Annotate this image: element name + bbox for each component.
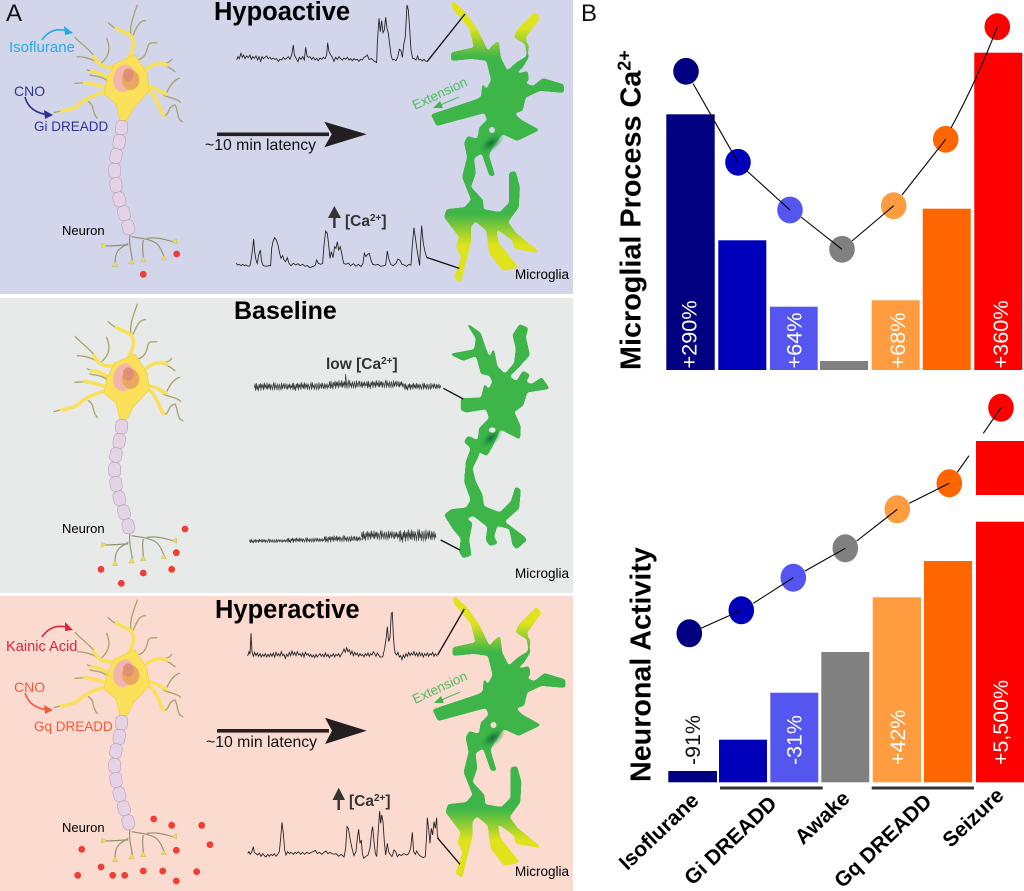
calcium trace: hyperactive lower [248, 811, 460, 864]
red dots: hyperactive [74, 816, 213, 884]
neuron: hyperactive [54, 600, 183, 862]
bar chart: neuronal activity [668, 441, 1024, 782]
calcium label: hyperactive: ] [385, 793, 391, 810]
label: CNO hypoactive: CNO [14, 83, 45, 99]
calcium arrow: hypoactive [328, 206, 341, 228]
bar chart: microglial process calcium: +64% [782, 312, 807, 368]
arrow: kainic acid [42, 622, 73, 637]
microglia: hypoactive [432, 2, 563, 282]
label: Kainic Acid: Kainic Acid [6, 639, 77, 655]
bar chart: microglial process calcium: +290% [677, 300, 702, 368]
label: Neuron hyperactive: Neuron [62, 820, 105, 835]
neuron: baseline [54, 304, 183, 566]
arrow: CNO to Gi DREADD [25, 97, 53, 119]
label: Isoflurane: Isoflurane [9, 39, 75, 56]
calcium label: hypoactive: ] [381, 213, 387, 230]
label: latency hyperactive: ~10 min latency [206, 734, 317, 751]
calcium trace: baseline upper [254, 374, 463, 399]
calcium trace: baseline lower [249, 530, 460, 550]
calcium label: hyperactive: 2+ [374, 793, 386, 804]
bar chart: microglial process calcium [666, 53, 1022, 370]
calcium label: hypoactive: 2+ [370, 213, 382, 224]
bar chart: neuronal activity: -31% [783, 715, 807, 765]
calcium label: baseline: 2+ [381, 356, 393, 367]
label: Microglia hypoactive: Microglia [515, 267, 570, 282]
bar chart: microglial process calcium: +68% [885, 312, 910, 368]
x label: Gq DREADD: Gq DREADD [830, 790, 936, 891]
red dots: hypoactive [140, 251, 180, 278]
panel label A: A [6, 0, 22, 27]
arrow: isoflurane [42, 26, 73, 40]
arrow: CNO to Gq DREADD [25, 693, 53, 714]
calcium label: hyperactive: [Ca [349, 793, 374, 810]
group bracket: Gi DREADD [720, 786, 823, 790]
calcium arrow: hyperactive [332, 788, 345, 810]
red dots: baseline [98, 526, 188, 587]
label: Microglia hyperactive: Microglia [515, 864, 570, 879]
neuron: hypoactive [54, 5, 183, 267]
extension arrow: hyperactive [434, 692, 460, 703]
panel label B: B [581, 0, 597, 27]
title: Hyperactive: Hyperactive [215, 596, 360, 624]
x label: Gi DREADD: Gi DREADD [680, 792, 781, 890]
calcium trace: hypoactive upper [237, 5, 465, 63]
calcium label: baseline: ] [393, 356, 398, 373]
calcium label: baseline: low [Ca [326, 356, 381, 373]
arrow: hyperactive latency [217, 718, 367, 744]
label: Gq DREADD: Gq DREADD [34, 719, 113, 734]
axis title: Microglial Process Ca2+: 2+ [615, 50, 635, 71]
bar chart: neuronal activity: +5,500% [989, 680, 1013, 765]
label: latency hypoactive: ~10 min latency [205, 137, 316, 154]
bar chart: neuronal activity: -91% [681, 715, 705, 765]
label: Gi DREADD: Gi DREADD [34, 119, 109, 134]
arrow: hypoactive latency [217, 122, 367, 147]
extension label: hyperactive: Extension [410, 668, 470, 707]
panel: hyperactive [0, 596, 573, 891]
label: CNO hyperactive: CNO [14, 679, 45, 695]
bar chart: microglial process calcium: +360% [988, 300, 1013, 368]
calcium label: hypoactive: [Ca [345, 213, 370, 230]
calcium trace: hypoactive lower [236, 226, 459, 268]
label: Neuron baseline: Neuron [62, 521, 105, 536]
panel: baseline [0, 298, 573, 593]
bar chart: neuronal activity: +42% [886, 710, 910, 765]
axis title: Microglial Process Ca2+: Microglial Process Ca [616, 71, 648, 370]
x label: Awake: Awake [791, 787, 854, 849]
group bracket: Gq DREADD [872, 786, 974, 790]
axis title: Neuronal Activity: Neuronal Activity [626, 547, 658, 782]
microglia: hyperactive [434, 597, 564, 877]
x label: Isoflurane: Isoflurane [615, 789, 703, 875]
panel: hypoactive [0, 0, 573, 294]
x label: Seizure: Seizure [938, 784, 1008, 852]
label: Microglia baseline: Microglia [515, 566, 570, 581]
line plot: microglial process calcium [673, 13, 1010, 263]
title: Baseline: Baseline [234, 297, 337, 325]
calcium trace: hyperactive upper [248, 609, 464, 660]
extension label: hypoactive: Extension [410, 74, 470, 113]
microglia: baseline [445, 325, 548, 557]
label: Neuron hypoactive: Neuron [62, 223, 105, 238]
line plot: neuronal activity [676, 394, 1014, 647]
extension arrow: hypoactive [433, 97, 459, 108]
